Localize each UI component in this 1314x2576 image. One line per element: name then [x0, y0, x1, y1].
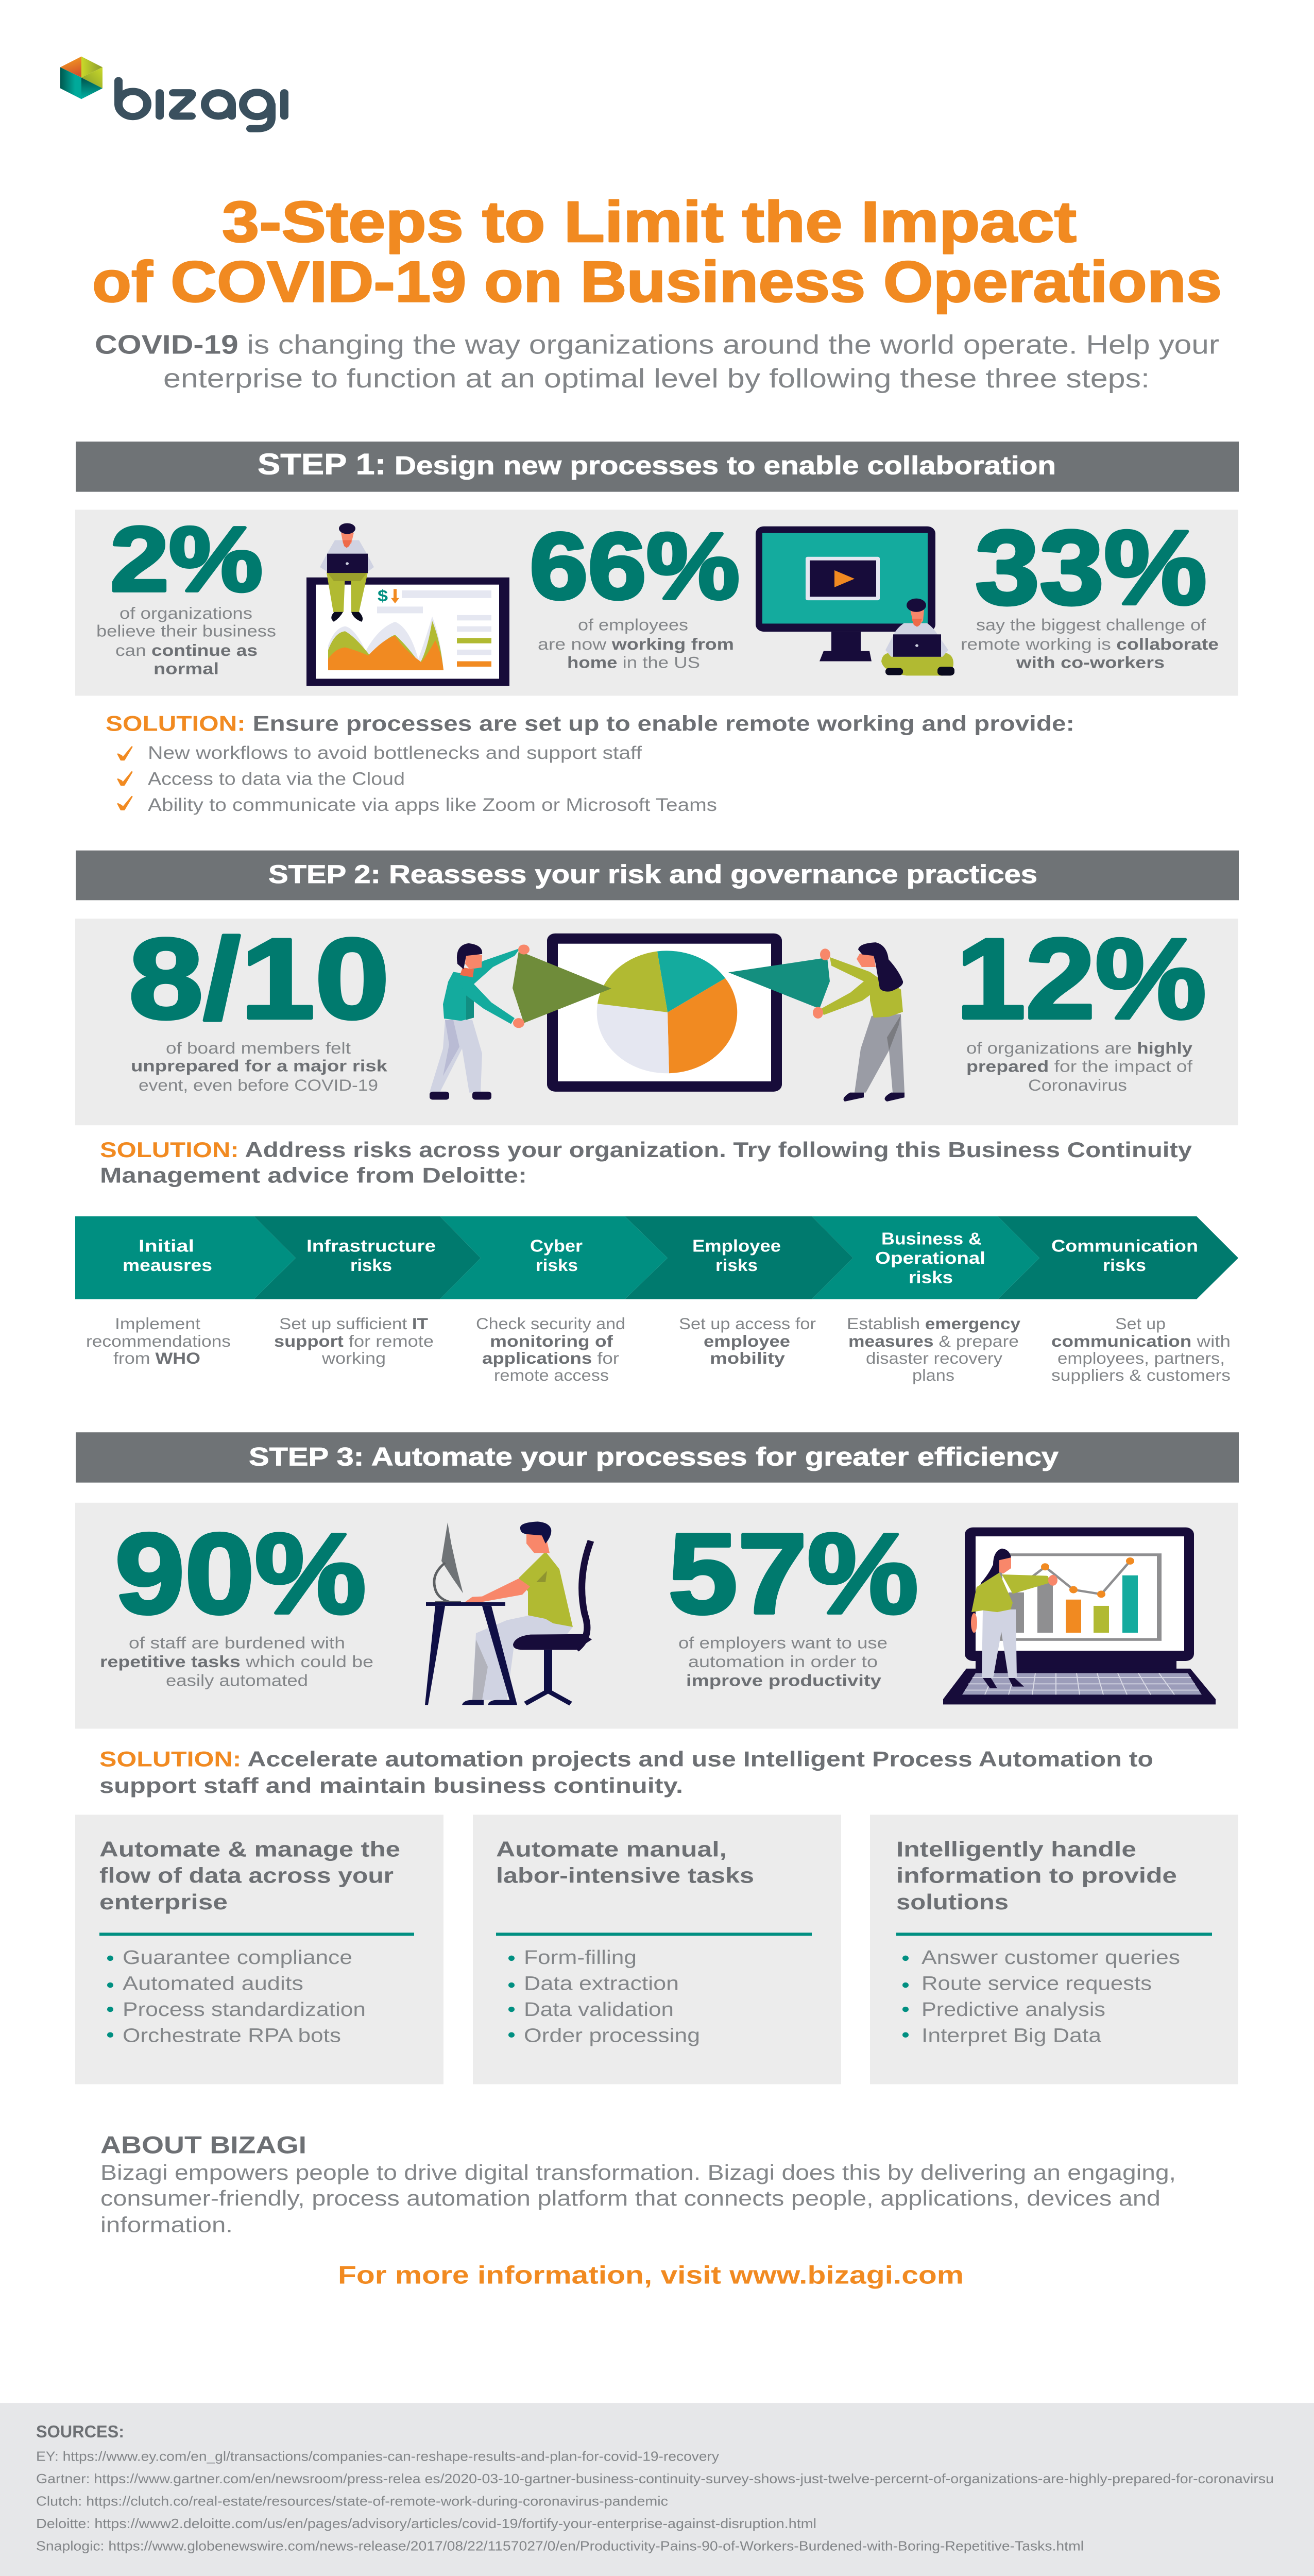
card bullet list: Route service requests [921, 1972, 1152, 1994]
card bullet list: Process standardization [123, 1998, 366, 2021]
stat: 33% [961, 509, 1219, 672]
card heading: Automate & manage the [99, 1837, 400, 1861]
icon: monitor with video player [756, 527, 935, 662]
description: cyber: monitoring of [490, 1332, 613, 1350]
card bullet list [508, 1946, 700, 2046]
about bizagi: ABOUT BIZAGI [100, 2131, 306, 2159]
pie chart [597, 951, 737, 1073]
stat: 8/10: 8/10 [129, 915, 389, 1043]
stat: 90%: of staff are burdened with [129, 1634, 345, 1652]
icon: man sitting with laptop [320, 523, 374, 622]
icon: laptop with presentation chart [943, 1528, 1216, 1704]
stat: 33%: say the biggest challenge of [976, 616, 1206, 634]
stat: 8/10: event, even before COVID-19 [139, 1076, 378, 1095]
chevron label: communication [1051, 1236, 1198, 1275]
line chart [1020, 1557, 1134, 1598]
chevron label: infrastructure: Infrastructure [306, 1236, 436, 1256]
description: employee [679, 1315, 816, 1367]
logo wordmark drawn as shape [118, 81, 284, 129]
chevron label: cyber [530, 1236, 583, 1275]
description: communication [1051, 1315, 1231, 1385]
step 2 heading bar: STEP 2: Reassess your risk and governance practices [268, 860, 1037, 889]
card heading: enterprise [99, 1890, 228, 1914]
card heading [99, 1837, 400, 1914]
description: employee: Set up access for [679, 1315, 816, 1333]
step 3 heading bar: STEP 3: Automate your processes for greater efficiency [249, 1442, 1059, 1471]
step 2 heading bar [76, 851, 1239, 900]
stat: 57%: of employers want to use [678, 1634, 888, 1652]
stat: 2%: of organizations [120, 604, 252, 622]
description: initial measures: from WHO [113, 1349, 200, 1367]
description: initial measures: Implement [115, 1315, 201, 1333]
checklist: step 1 [118, 743, 717, 815]
description: initial measures: recommendations [86, 1332, 231, 1350]
card bullet list [107, 1946, 366, 2046]
card bullet list: Data validation [524, 1998, 674, 2021]
card bullet list: Data extraction [524, 1972, 679, 1994]
card heading: labor-intensive tasks [496, 1863, 754, 1888]
chevron label: business and operational: Business & [881, 1229, 982, 1248]
stat: 57%: 57% [668, 1510, 918, 1637]
solution heading: step 1: SOLUTION: Ensure processes are set up to enable remote working and provide: [106, 711, 1074, 736]
stat: 33%: 33% [975, 509, 1207, 626]
card bullet list: Automated audits [123, 1972, 303, 1994]
panel: automate data flow [75, 1815, 443, 2084]
chevron label: cyber: risks [536, 1256, 578, 1275]
intro text [95, 329, 1219, 393]
about bizagi: consumer-friendly, process automation platform that connects people, applications, devices and [100, 2186, 1161, 2211]
description: business and operational [847, 1315, 1020, 1385]
description: infrastructure: support for remote [274, 1332, 434, 1350]
panel: step 2 statistics [75, 915, 1238, 1125]
stat: 33%: with co-workers [1016, 654, 1165, 672]
chevron label: communication: risks [1103, 1256, 1146, 1275]
card bullet list [902, 1946, 1180, 2046]
description: communication: employees, partners, [1057, 1349, 1225, 1367]
panel: sources: Gartner: https://www.gartner.com/en/newsroom/press-relea es/2020-03-10-gartner-business-continuity-survey-shows-just-twelve-percernt-of-organizations-are-highly-prepared-for-coronavirsu [36, 2471, 1274, 2486]
description: business and operational: plans [912, 1366, 954, 1385]
stat: 2%: normal [153, 660, 219, 678]
description: cyber [476, 1315, 625, 1385]
chevron label: cyber: Cyber [530, 1236, 583, 1256]
icon: woman holding pie slice [813, 942, 905, 1101]
description: business and operational: disaster recovery [866, 1349, 1002, 1367]
check item 2: Access to data via the Cloud [148, 769, 405, 789]
card bullet list: Orchestrate RPA bots [123, 2024, 341, 2046]
stat: 8/10 [129, 915, 389, 1095]
solution heading: step 3 [99, 1747, 1153, 1798]
description: employee: mobility [710, 1349, 785, 1367]
title: 3-Steps to Limit the Impact [222, 190, 1077, 254]
description: business and operational: measures & prepare [848, 1332, 1019, 1350]
description: cyber: applications for [482, 1349, 619, 1367]
card bullet list: Guarantee compliance [123, 1946, 352, 1969]
icon: hexagon logo mark [60, 57, 103, 99]
stat: 2% [96, 507, 276, 678]
stat: 12%: of organizations are highly [966, 1039, 1192, 1057]
bar chart [1009, 1575, 1138, 1633]
chevron label: communication: Communication [1051, 1236, 1198, 1256]
chevron label: employee: Employee [692, 1236, 781, 1256]
icon: person working at desk [425, 1521, 592, 1705]
chevron label: business and operational: risks [909, 1268, 953, 1287]
card heading [496, 1837, 754, 1888]
stat: 57% [668, 1510, 918, 1690]
chevron process: risk categories [75, 1216, 1238, 1299]
chevron label: business and operational: Operational [875, 1248, 985, 1267]
about bizagi: information. [100, 2213, 233, 2237]
stat: 8/10: unprepared for a major risk [131, 1057, 387, 1075]
stat: 66%: 66% [530, 513, 740, 619]
chevron label: initial measures: meausres [123, 1256, 212, 1275]
chevron label: initial measures [123, 1236, 212, 1275]
solution heading: step 3: support staff and maintain business continuity. [99, 1773, 683, 1798]
card heading: information to provide [896, 1863, 1177, 1888]
stat: 2%: can continue as [115, 641, 258, 659]
stat: 33%: remote working is collaborate [961, 635, 1219, 653]
about bizagi: Bizagi empowers people to drive digital transformation. Bizagi does this by delivering an engaging, [100, 2160, 1176, 2184]
description: initial measures [86, 1315, 231, 1367]
stat: 12%: Coronavirus [1028, 1076, 1127, 1095]
stat: 66%: of employees [578, 616, 688, 634]
check item 1: New workflows to avoid bottlenecks and support staff [148, 743, 642, 763]
description: infrastructure [274, 1315, 434, 1367]
icon: dashboard board with chart [306, 578, 509, 686]
title [92, 190, 1222, 314]
panel: sources: Snaplogic: https://www.globenewswire.com/news-release/2017/08/22/1157027/0/en/Productivity-Pains-90-of-Workers-Burdened-with-Boring-Repetitive-Tasks.html [36, 2538, 1084, 2553]
stat: 90%: easily automated [166, 1672, 308, 1690]
card heading [896, 1837, 1177, 1914]
card bullet list: Predictive analysis [921, 1998, 1105, 2021]
logo: bizagi [60, 57, 284, 129]
call to action: For more information, visit www.bizagi.com [338, 2261, 964, 2290]
description: communication: communication with [1051, 1332, 1231, 1350]
about bizagi [100, 2131, 1176, 2237]
chevron label: initial measures: Initial [139, 1236, 194, 1256]
title: of COVID-19 on Business Operations [92, 249, 1222, 314]
chevron backgrounds [75, 1216, 1238, 1299]
stat: 57%: improve productivity [686, 1672, 881, 1690]
stat: 2%: believe their business [96, 622, 276, 640]
chevron label: employee [692, 1236, 781, 1275]
solution heading: step 3: SOLUTION: Accelerate automation projects and use Intelligent Process Automation to [99, 1747, 1153, 1771]
step 1 heading bar: STEP 1: Design new processes to enable collaboration [258, 448, 1056, 481]
description: business and operational: Establish emergency [847, 1315, 1020, 1333]
stat: 57%: automation in order to [688, 1653, 878, 1671]
panel: step 1 statistics [75, 507, 1238, 696]
card heading: solutions [896, 1890, 1009, 1914]
panel: sources: EY: https://www.ey.com/en_gl/transactions/companies-can-reshape-results-and-plan-for-covid-19-recovery [36, 2449, 719, 2464]
panel: automate manual tasks [473, 1815, 841, 2084]
description: communication: suppliers & customers [1051, 1366, 1231, 1385]
panel: sources [0, 2403, 1314, 2576]
intro text: COVID-19 is changing the way organizations around the world operate. Help your [95, 329, 1219, 360]
card heading: Automate manual, [496, 1837, 727, 1861]
chevron label: employee: risks [715, 1256, 758, 1275]
description: communication: Set up [1115, 1315, 1166, 1333]
intro text: enterprise to function at an optimal level by following these three steps: [163, 363, 1150, 393]
description: cyber: Check security and [476, 1315, 625, 1333]
icon: phone with pie chart [513, 934, 830, 1092]
stat: 2%: 2% [110, 507, 263, 611]
stat: 66%: are now working from [538, 635, 734, 653]
panel: sources: Clutch: https://clutch.co/real-estate/resources/state-of-remote-work-during-coronavirus-pandemic [36, 2494, 668, 2509]
stat: 90%: 90% [115, 1510, 366, 1637]
card heading: flow of data across your [99, 1863, 394, 1888]
description: cyber: remote access [494, 1366, 609, 1385]
description: infrastructure: Set up sufficient IT [279, 1315, 428, 1333]
card heading: Intelligently handle [896, 1837, 1136, 1861]
card bullet list: Form-filling [524, 1946, 637, 1969]
stat: 12%: prepared for the impact of [966, 1058, 1193, 1076]
step 3 heading bar [76, 1432, 1239, 1483]
stat: 90%: repetitive tasks which could be [100, 1653, 373, 1671]
check item 3: Ability to communicate via apps like Zoom or Microsoft Teams [148, 795, 717, 815]
panel: step 3 statistics [75, 1503, 1238, 1728]
card bullet list: Answer customer queries [921, 1946, 1180, 1969]
stat: 66%: home in the US [567, 654, 700, 672]
panel: handle information [870, 1815, 1238, 2084]
panel: sources: Deloitte: https://www2.deloitte.com/us/en/pages/advisory/articles/covid-19/fortify-your-enterprise-against-disruption.html [36, 2516, 816, 2531]
chevron label: business and operational [875, 1229, 985, 1287]
panel: sources: SOURCES: [36, 2422, 124, 2442]
chevron label: infrastructure [306, 1236, 436, 1275]
stat: 90% [100, 1510, 373, 1690]
step 1 heading bar [76, 442, 1239, 492]
icon: woman presenting [971, 1549, 1057, 1688]
stat: 12%: 12% [956, 915, 1206, 1043]
solution heading: step 2: Management advice from Deloitte: [100, 1163, 527, 1188]
solution heading: step 2: SOLUTION: Address risks across your organization. Try following this Business Continuity [100, 1138, 1192, 1162]
card bullet list: Order processing [524, 2024, 700, 2046]
keyboard grid [965, 1673, 1199, 1694]
description: infrastructure: working [321, 1349, 386, 1367]
stat: 8/10: of board members felt [166, 1039, 351, 1057]
stat: 12% [956, 915, 1206, 1095]
description: employee: employee [704, 1332, 790, 1350]
card bullet list: Interpret Big Data [921, 2024, 1101, 2046]
icon: dashboard board with chart: $ [378, 587, 388, 605]
solution heading: step 2 [100, 1138, 1192, 1188]
icon: man holding pie slice [430, 943, 530, 1100]
chevron label: infrastructure: risks [350, 1256, 392, 1275]
icon: person cross-legged with laptop [881, 599, 954, 675]
risk descriptions [86, 1315, 1231, 1385]
stat: 66% [530, 513, 740, 672]
